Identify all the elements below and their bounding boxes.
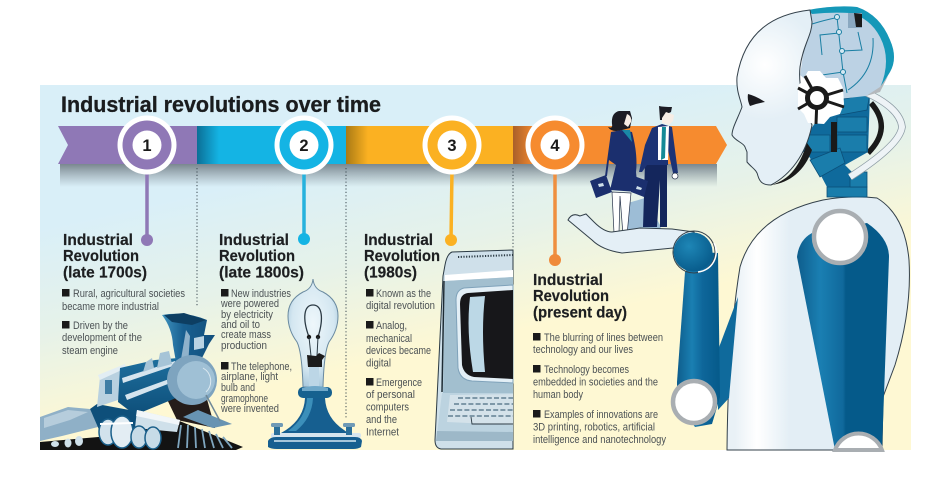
icon: personal computer [435, 250, 513, 449]
bullets: present day: 3D printing, robotics, artificial [533, 422, 655, 434]
robot neck [797, 92, 902, 197]
bullets: 1700s [62, 288, 185, 357]
panel: background [40, 85, 911, 450]
bullets: 1800s: were powered [220, 298, 279, 310]
robot upper arm [797, 223, 889, 450]
bullets: 1800s: airplane, light [221, 371, 278, 383]
column 3 [364, 232, 440, 438]
bullets: 1980s: digital [366, 358, 391, 370]
bullets: present day: The blurring of lines between [544, 332, 663, 344]
title: Industrial revolutions over time [61, 92, 381, 117]
bullets: 1980s: Analog, [376, 320, 407, 332]
bullets: 1980s: Known as the [376, 288, 431, 300]
marker 4: 4 [550, 137, 560, 155]
icon: light bulb [268, 279, 362, 449]
briefcase [631, 176, 648, 197]
bullets: 1800s [220, 288, 292, 415]
bullets: present day: technology and our lives [533, 344, 633, 356]
bullets: 1700s: Driven by the [73, 320, 128, 332]
heading: 1700s: (late 1700s) [63, 264, 147, 282]
bullets: 1980s: digital revolution [366, 300, 435, 312]
bullets: 1800s: by electricity [221, 309, 273, 321]
bullets: 1700s: Rural, agricultural societies [73, 288, 185, 300]
bullets: 1800s: production [221, 340, 267, 352]
heading: present day: Industrial [533, 272, 603, 289]
bullets: 1980s: mechanical [366, 333, 412, 345]
woman [590, 111, 638, 235]
heading: 1980s: Industrial [364, 232, 433, 249]
bullets: 1800s: The telephone, [231, 361, 292, 373]
bullets: 1980s: of personal [366, 389, 415, 401]
robot forearm and hand [568, 214, 720, 427]
heading: present day: Revolution [533, 288, 609, 305]
heading: present day: (present day) [533, 304, 627, 322]
bullets: 1980s: computers [366, 402, 409, 414]
bullets: 1800s: gramophone [221, 393, 268, 405]
bullets: present day [533, 332, 666, 446]
bar shadow [60, 164, 717, 187]
bullets: 1700s: development of the [62, 332, 142, 344]
bullets: 1800s: New industries [231, 288, 291, 300]
marker 1 [118, 116, 176, 246]
column 1 [62, 232, 185, 357]
bullets: 1980s: and the [366, 414, 397, 426]
bullets: 1980s [366, 288, 435, 438]
bullets: present day: embedded in societies and the [533, 376, 658, 388]
marker 2 [274, 116, 334, 245]
robot skull with circuits [800, 6, 894, 100]
bullets: present day: Examples of innovations are [544, 409, 658, 421]
heading: 1980s: (1980s) [364, 264, 417, 282]
bullets: present day: Technology becomes [544, 364, 629, 376]
bullets: 1980s: Internet [366, 426, 399, 438]
bullets: 1700s: steam engine [62, 345, 118, 357]
bullets: 1800s: were invented [220, 403, 279, 415]
timeline arrow bar [58, 126, 727, 164]
column 4 [533, 272, 666, 446]
heading: 1800s: Revolution [219, 248, 295, 265]
bullets: present day: human body [533, 389, 583, 401]
bullets: 1800s: and oil to [221, 319, 260, 331]
heading: 1800s: (late 1800s) [219, 264, 304, 282]
robot jaw shadow [771, 143, 812, 185]
bullets: 1980s: Emergence [376, 377, 422, 389]
marker 4 [526, 116, 584, 266]
bullets: present day: intelligence and nanotechnology [533, 434, 666, 446]
marker 1: 1 [142, 137, 152, 155]
bullets: 1800s: create mass [221, 329, 271, 341]
dotted dividers [197, 168, 513, 450]
icon: steam locomotive [40, 313, 243, 450]
bullets: 1800s: bulb and [221, 382, 255, 394]
robot ear gear [798, 71, 844, 124]
heading: 1980s: Revolution [364, 248, 440, 265]
robot body [718, 197, 909, 450]
bullets: 1980s: devices became [366, 345, 431, 357]
heading: 1700s: Revolution [63, 248, 139, 265]
man [639, 106, 678, 227]
column 2 [219, 232, 304, 415]
marker 2: 2 [299, 137, 309, 155]
marker 3 [422, 116, 482, 246]
icon: businesswoman and businessman [590, 106, 678, 235]
heading: 1700s: Industrial [63, 232, 133, 249]
bullets: 1700s: became more industrial [62, 301, 159, 313]
heading: 1800s: Industrial [219, 232, 289, 249]
robot eye [748, 94, 765, 106]
marker 3: 3 [447, 137, 457, 155]
robot face mask [732, 10, 812, 185]
